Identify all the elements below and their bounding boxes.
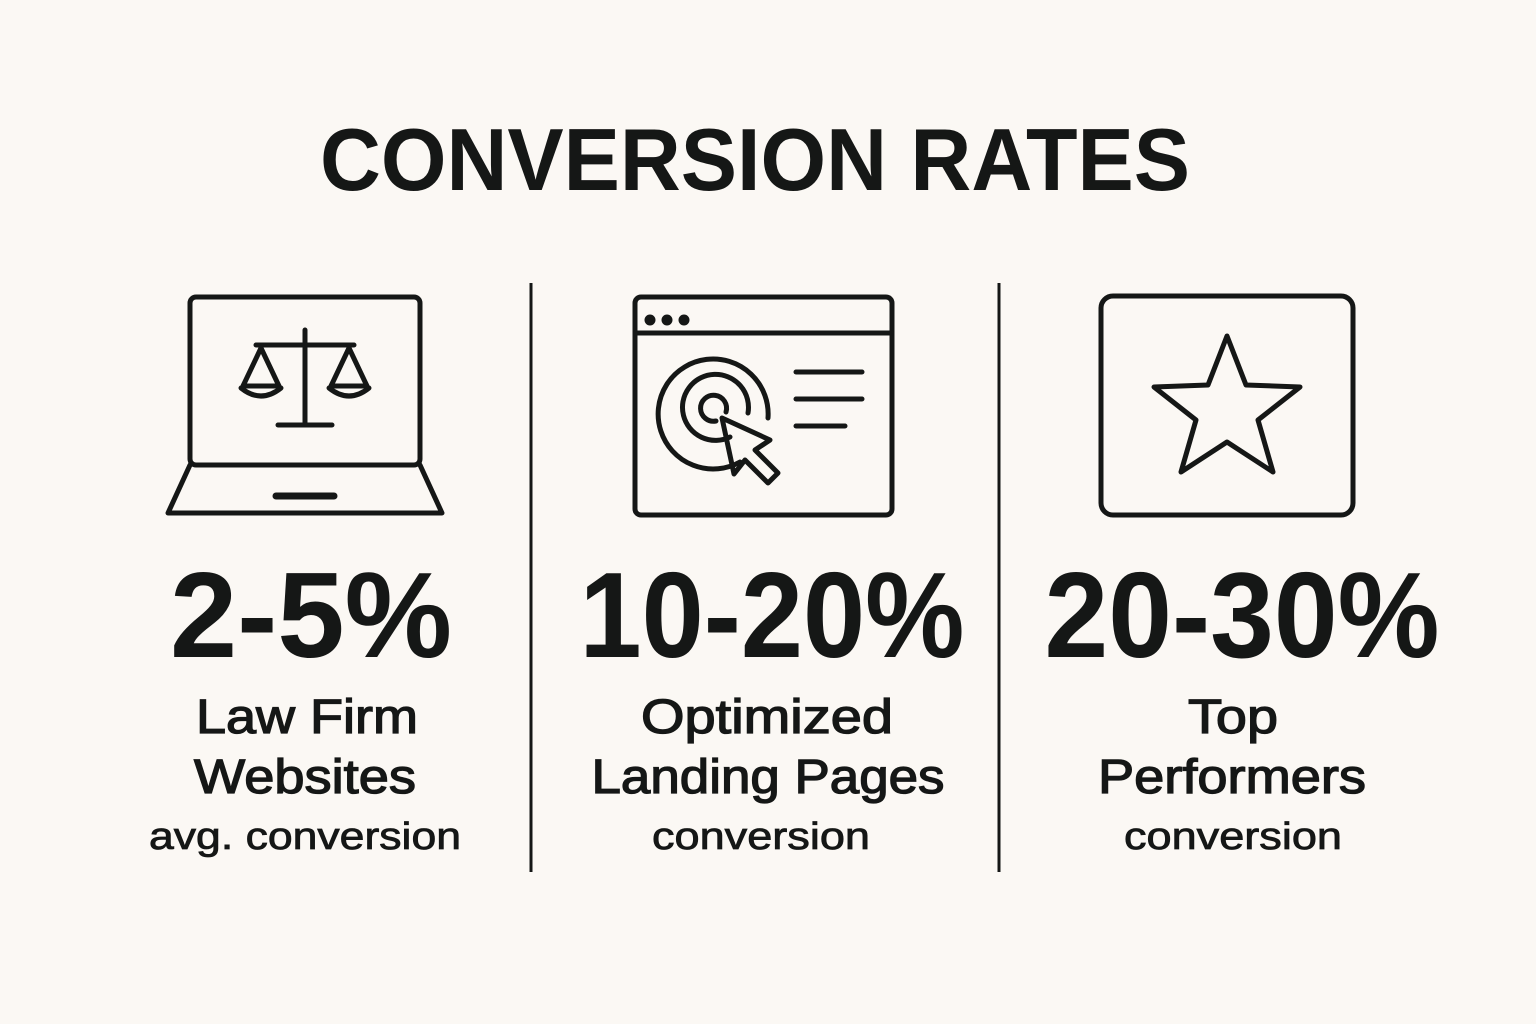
column 1 text: avg. conversion <box>149 816 461 858</box>
column 1 text <box>149 547 461 858</box>
column 3 text <box>1044 547 1440 858</box>
column 2 text: conversion <box>652 816 870 858</box>
column 3 text: Top <box>1188 691 1278 744</box>
icon: browser with target and cursor <box>635 297 892 515</box>
column 2 text: Landing Pages <box>592 751 944 804</box>
column 2 text: 10-20% <box>580 547 964 683</box>
column 2 text <box>580 547 964 858</box>
column 3 text: Performers <box>1098 751 1366 804</box>
column 1 text: Law Firm <box>196 691 418 744</box>
column 1 text: 2-5% <box>170 547 452 683</box>
title: CONVERSION RATES <box>320 110 1190 209</box>
column 3 text: conversion <box>1124 816 1342 858</box>
column 3 text: 20-30% <box>1044 547 1440 683</box>
icon: laptop with scales <box>168 297 442 513</box>
column 1 text: Websites <box>194 751 416 804</box>
icon: star in box <box>1101 296 1353 515</box>
column 2 text: Optimized <box>641 691 893 744</box>
